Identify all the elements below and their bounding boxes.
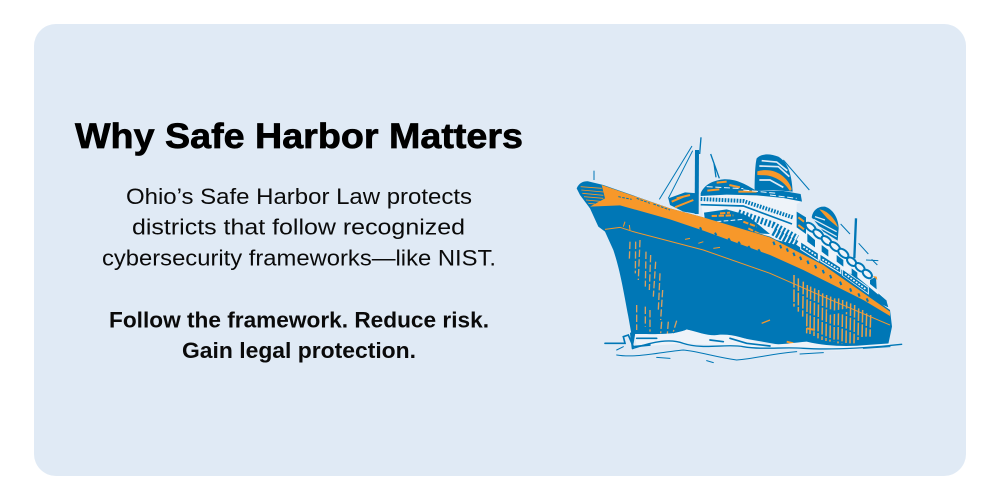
title: Why Safe Harbor Matters [75,117,523,156]
text block: description: cybersecurity frameworks—like NIST. [102,246,496,270]
front funnel [755,154,793,192]
rear deck band [770,238,888,307]
text block: key message: Gain legal protection. [182,338,416,363]
ship masts and rigging [594,137,878,265]
text block: key message [109,308,489,363]
window rows lower [738,213,797,238]
illustration: ocean liner [577,137,902,363]
lifeboats [804,221,874,280]
window rows upper [701,199,793,217]
hull orange stripe [590,185,890,316]
white flecks on bridge [707,187,797,198]
hull stern reflections [794,275,871,343]
bridge top [701,179,802,202]
lower bridge mass [704,209,770,234]
waves and foam [605,328,902,363]
text block: description [102,184,496,270]
text block: key message: Follow the framework. Reduce risk. [109,308,489,332]
railing marks on stripe [618,197,670,210]
text block: description: Ohio’s Safe Harbor Law protects [126,184,472,209]
ship hull [577,181,892,347]
portholes [700,227,868,302]
small gull mark [762,320,770,323]
bow detail lines [581,187,603,204]
text block: description: districts that follow recognized [132,214,465,240]
hull bow reflections [629,240,677,334]
hull waterline and highlights [605,222,890,325]
rear funnel [812,207,839,241]
upper works light base [702,190,888,308]
forward deckhouse [668,192,698,214]
ship superstructure [668,179,888,308]
aft house [797,212,806,234]
orange deck flecks [672,182,757,207]
